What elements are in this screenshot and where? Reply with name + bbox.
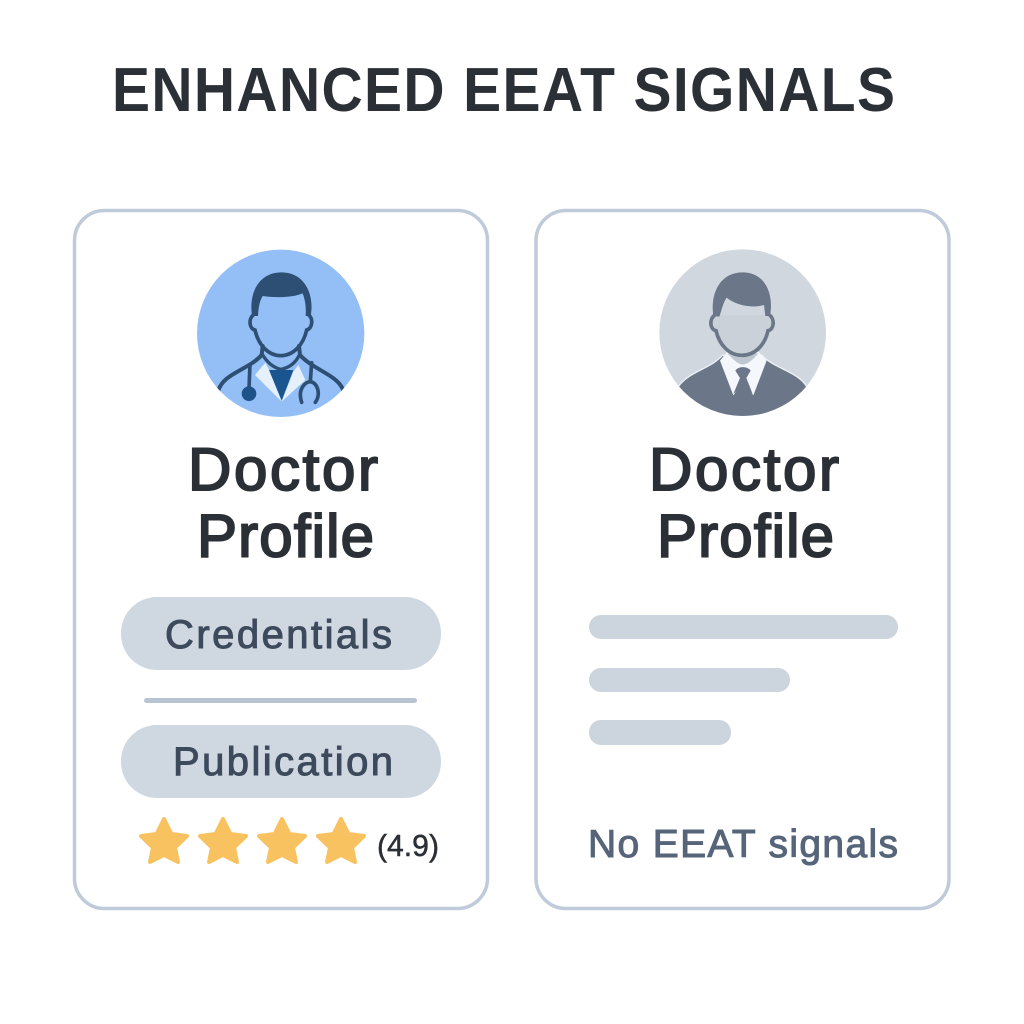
rating stars [141,819,364,862]
panel: basic profile [536,210,949,908]
panel: enhanced profile [74,210,488,908]
rating value: (4.9) [377,828,439,863]
title: ENHANCED EEAT SIGNALS [112,55,895,125]
icon: generic avatar [659,249,826,420]
heading: doctor profile: Doctor [188,436,378,503]
pill: publication [121,725,441,798]
placeholder lines [589,615,898,745]
pill: publication: Publication [173,740,393,784]
heading: doctor profile [649,436,839,570]
pill: credentials: Credentials [165,613,392,657]
heading: doctor profile: Doctor [649,436,839,503]
heading: doctor profile [188,436,378,570]
pill: credentials [121,597,441,670]
heading: doctor profile: Profile [657,502,834,570]
caption: no eeat signals: No EEAT signals [588,823,898,866]
icon: doctor avatar [197,250,364,417]
heading: doctor profile: Profile [197,502,374,570]
